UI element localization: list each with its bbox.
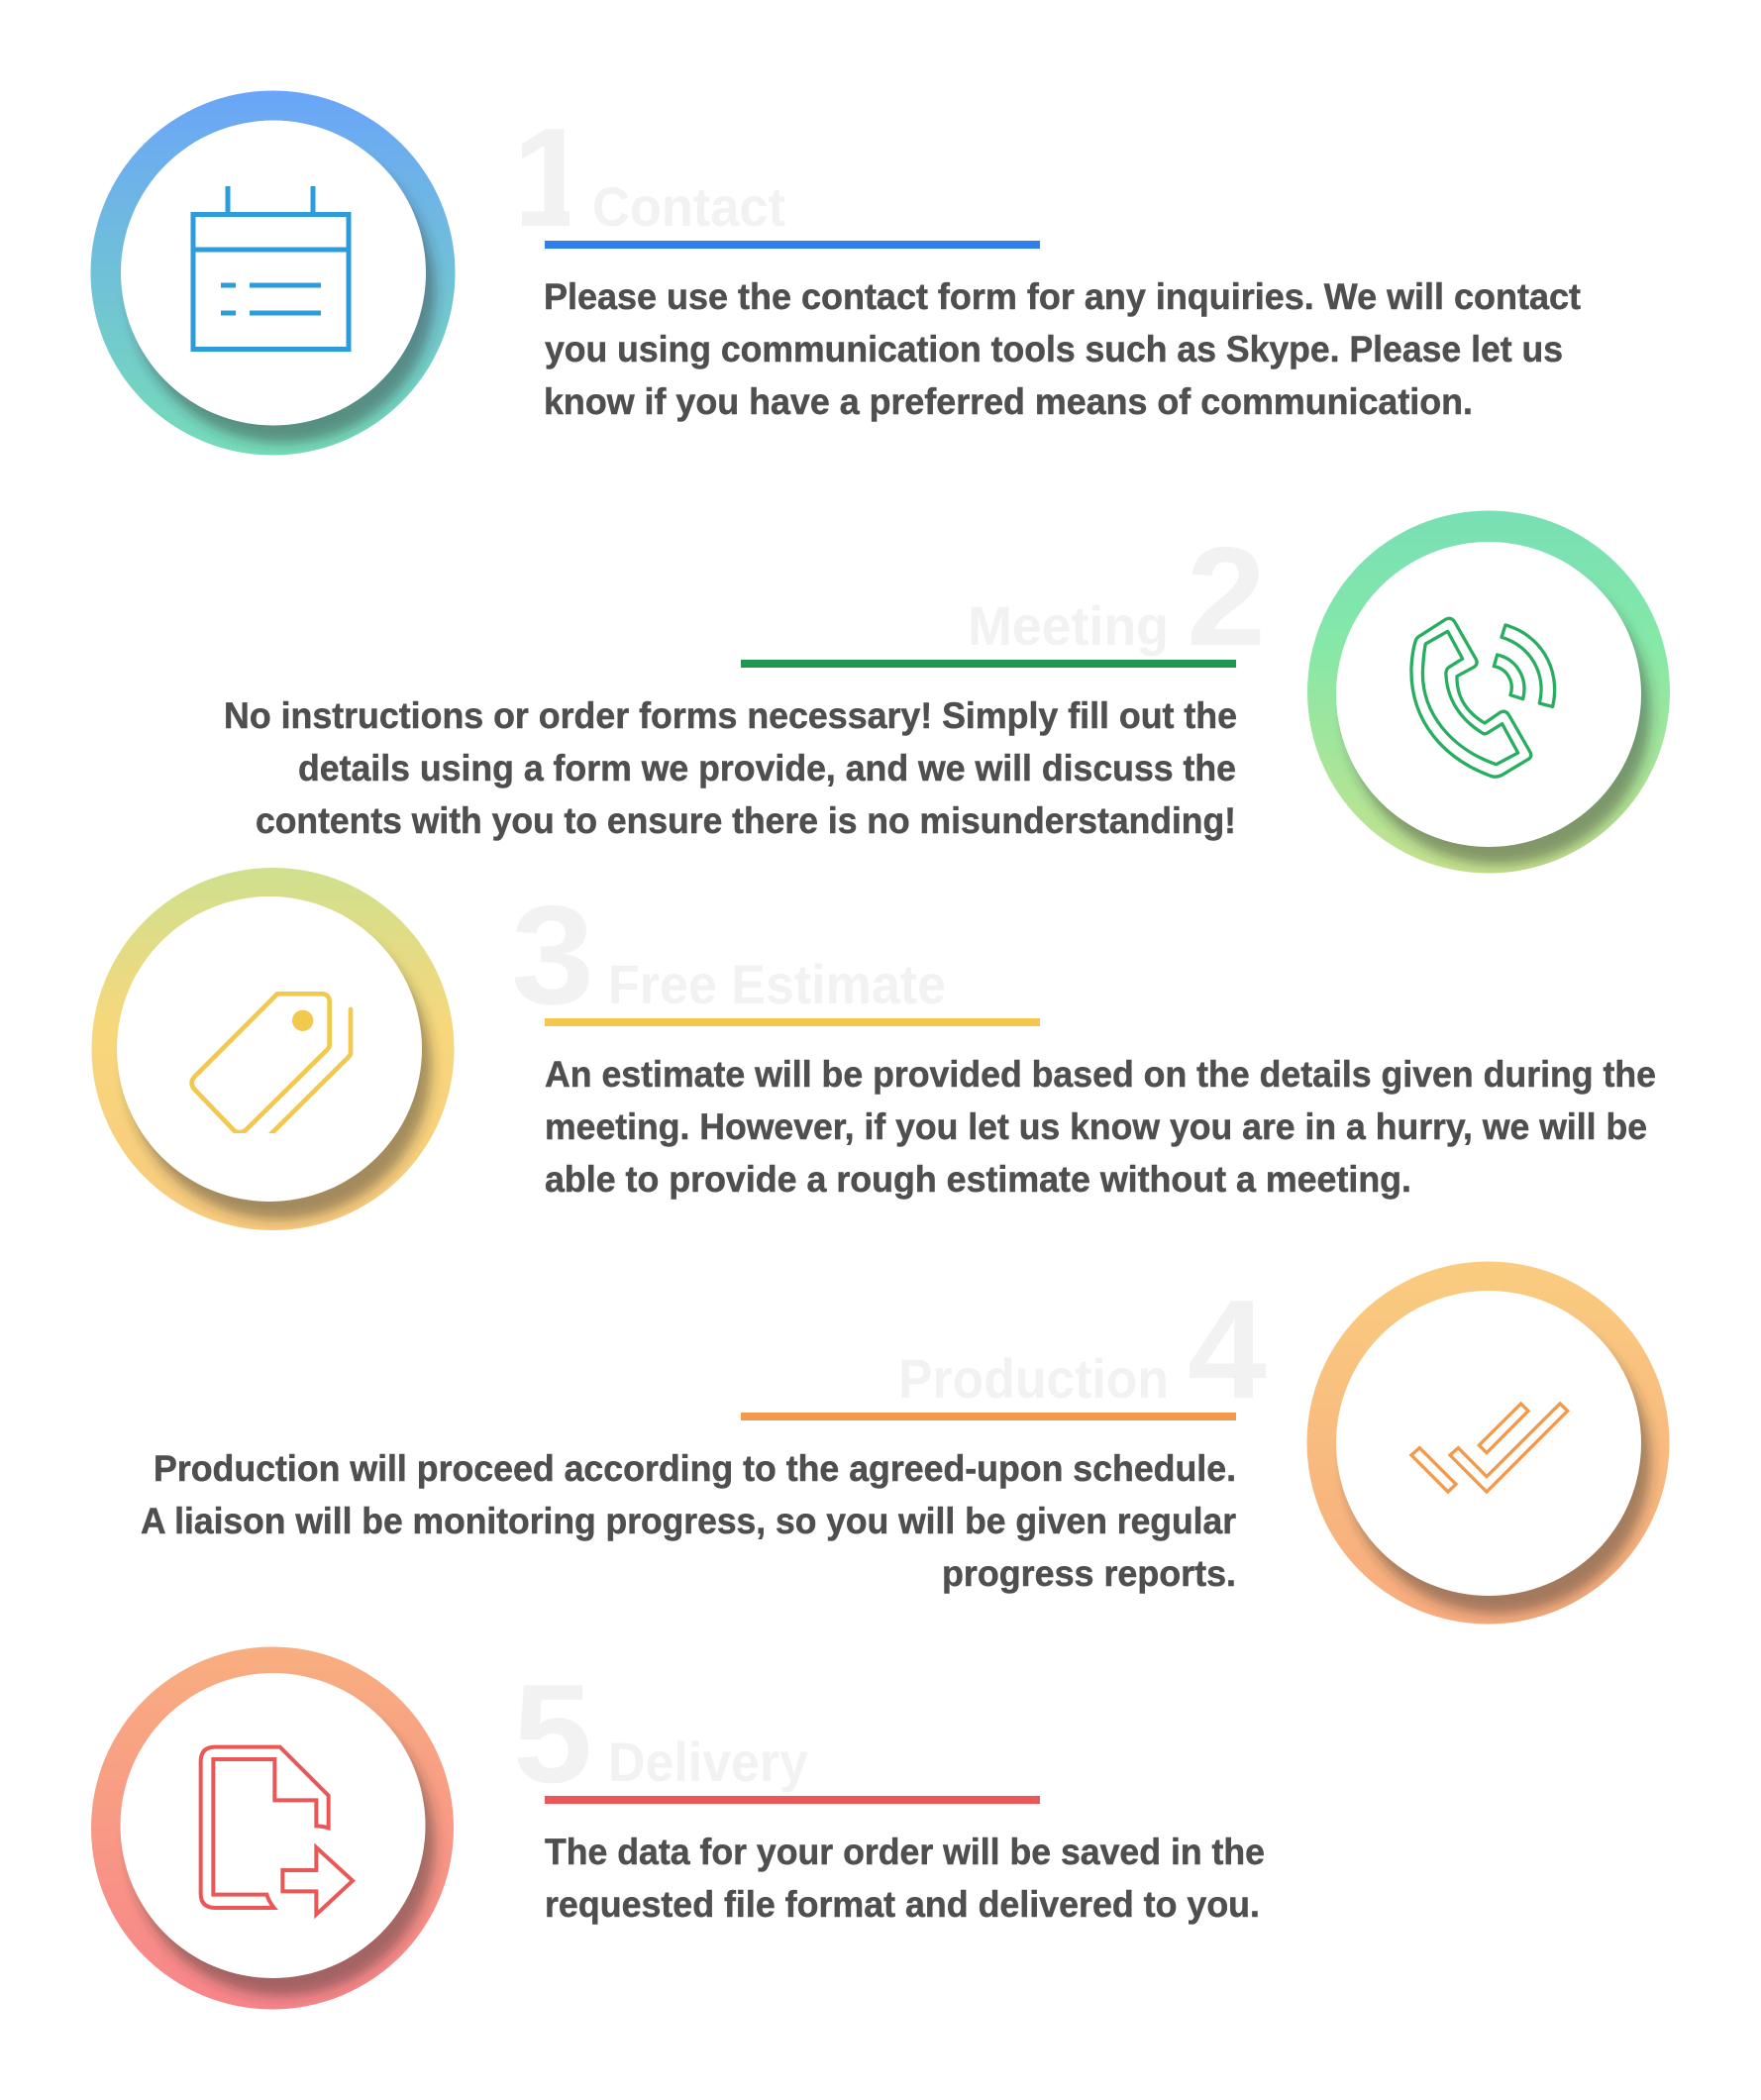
divider bar: green — [741, 660, 1236, 668]
ring: free estimate — [91, 868, 454, 1230]
text block: production: A liaison will be monitoring progress, so you will be given regular — [141, 1501, 1236, 1541]
heading: production: Production — [898, 1347, 1169, 1410]
icon: price tag — [192, 994, 351, 1136]
text block: contact: Please use the contact form for any inquiries. We will contact — [544, 276, 1581, 317]
text block: free estimate — [545, 1054, 1656, 1200]
text block: contact: you using communication tools such as Skype. Please let us — [545, 329, 1563, 369]
text block: production: progress reports. — [942, 1553, 1236, 1594]
step 2: meeting — [224, 511, 1670, 874]
ring: contact — [91, 91, 456, 456]
number 1: 1 — [511, 99, 590, 257]
text block: meeting — [224, 695, 1237, 841]
number 5: 5 — [513, 1655, 592, 1813]
ring: meeting — [1307, 511, 1670, 874]
number 3: 3 — [511, 877, 594, 1034]
number 4: 4 — [1188, 1271, 1267, 1428]
text block: delivery: requested file format and delivered to you. — [545, 1884, 1260, 1925]
text block: delivery — [545, 1832, 1265, 1925]
text block: contact: know if you have a preferred means of communication. — [544, 381, 1473, 422]
divider bar: red — [545, 1796, 1040, 1804]
text block: production: Production will proceed according to the agreed-upon schedule. — [154, 1448, 1236, 1489]
text block: production — [141, 1448, 1236, 1594]
step 5: delivery — [91, 1646, 1265, 2009]
icon: file with arrow — [201, 1747, 353, 1915]
step 3: free estimate — [91, 868, 1656, 1230]
text block: free estimate: able to provide a rough estimate without a meeting. — [545, 1159, 1411, 1200]
step 1: contact — [91, 91, 1581, 456]
heading: contact: Contact — [592, 175, 785, 238]
heading: free estimate: Free Estimate — [608, 953, 946, 1015]
text block: meeting: details using a form we provide, and we will discuss the — [298, 748, 1236, 788]
text block: meeting: contents with you to ensure there is no misunderstanding! — [256, 800, 1236, 841]
text block: contact — [544, 276, 1581, 422]
heading: meeting: Meeting — [968, 594, 1169, 657]
text block: meeting: No instructions or order forms necessary! Simply fill out the — [224, 695, 1237, 736]
ring: delivery — [91, 1646, 454, 2009]
heading: delivery: Delivery — [608, 1731, 808, 1793]
icon: telephone — [1411, 618, 1555, 777]
divider bar: yellow — [545, 1018, 1040, 1026]
icon: calendar — [193, 186, 349, 349]
text block: delivery: The data for your order will be saved in the — [545, 1832, 1265, 1872]
number 2: 2 — [1187, 518, 1266, 676]
text block: free estimate: An estimate will be provided based on the details given during the — [545, 1054, 1656, 1095]
step 4: production — [141, 1262, 1670, 1625]
icon: double check mark — [1411, 1404, 1568, 1492]
divider bar: orange — [741, 1413, 1236, 1420]
divider bar: blue — [545, 241, 1040, 249]
text block: free estimate: meeting. However, if you let us know you are in a hurry, we will be — [545, 1106, 1647, 1147]
ring: production — [1307, 1262, 1670, 1625]
